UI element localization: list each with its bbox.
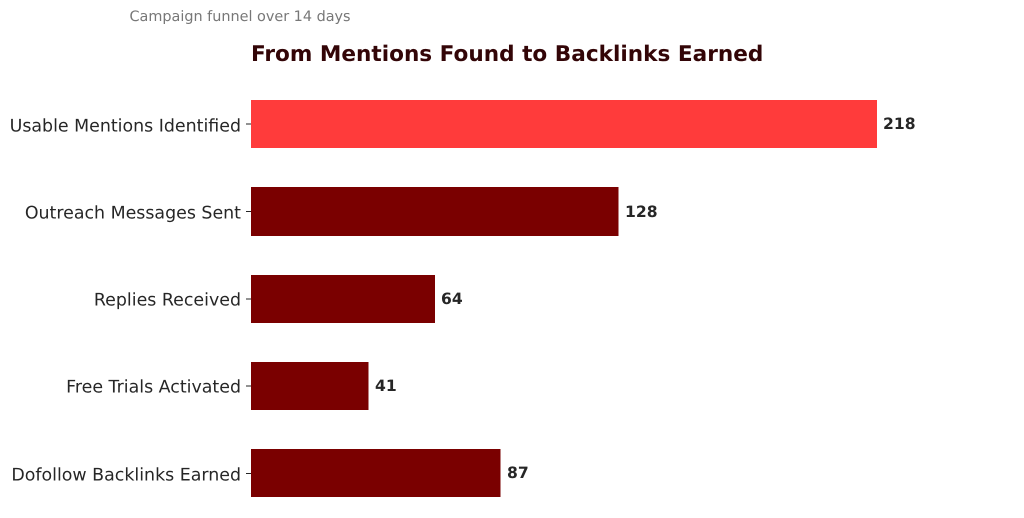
row: Dofollow Backlinks Earned: 87 xyxy=(507,464,529,482)
row: Usable Mentions Identified: 218 xyxy=(883,115,916,133)
row: Outreach Messages Sent: 128 xyxy=(625,203,658,221)
row: Outreach Messages Sent: Outreach Messages Sent xyxy=(25,203,241,223)
row: Free Trials Activated xyxy=(66,362,397,410)
row: Usable Mentions Identified xyxy=(10,100,916,148)
row: Replies Received: Replies Received xyxy=(94,290,241,310)
row: Replies Received xyxy=(94,275,463,323)
row: Dofollow Backlinks Earned: Dofollow Backlinks Earned xyxy=(11,465,241,485)
row: Dofollow Backlinks Earned xyxy=(11,449,529,497)
row: Free Trials Activated: Free Trials Activated xyxy=(66,378,241,398)
row: Usable Mentions Identified: Usable Mentions Identified xyxy=(10,116,241,136)
title: From Mentions Found to Backlinks Earned xyxy=(251,42,763,67)
subtitle: Campaign funnel over 14 days xyxy=(130,9,351,25)
row: Free Trials Activated: 41 xyxy=(375,377,397,395)
bar chart xyxy=(10,100,916,497)
row: Replies Received: 64 xyxy=(441,290,463,308)
row: Outreach Messages Sent xyxy=(25,187,658,236)
